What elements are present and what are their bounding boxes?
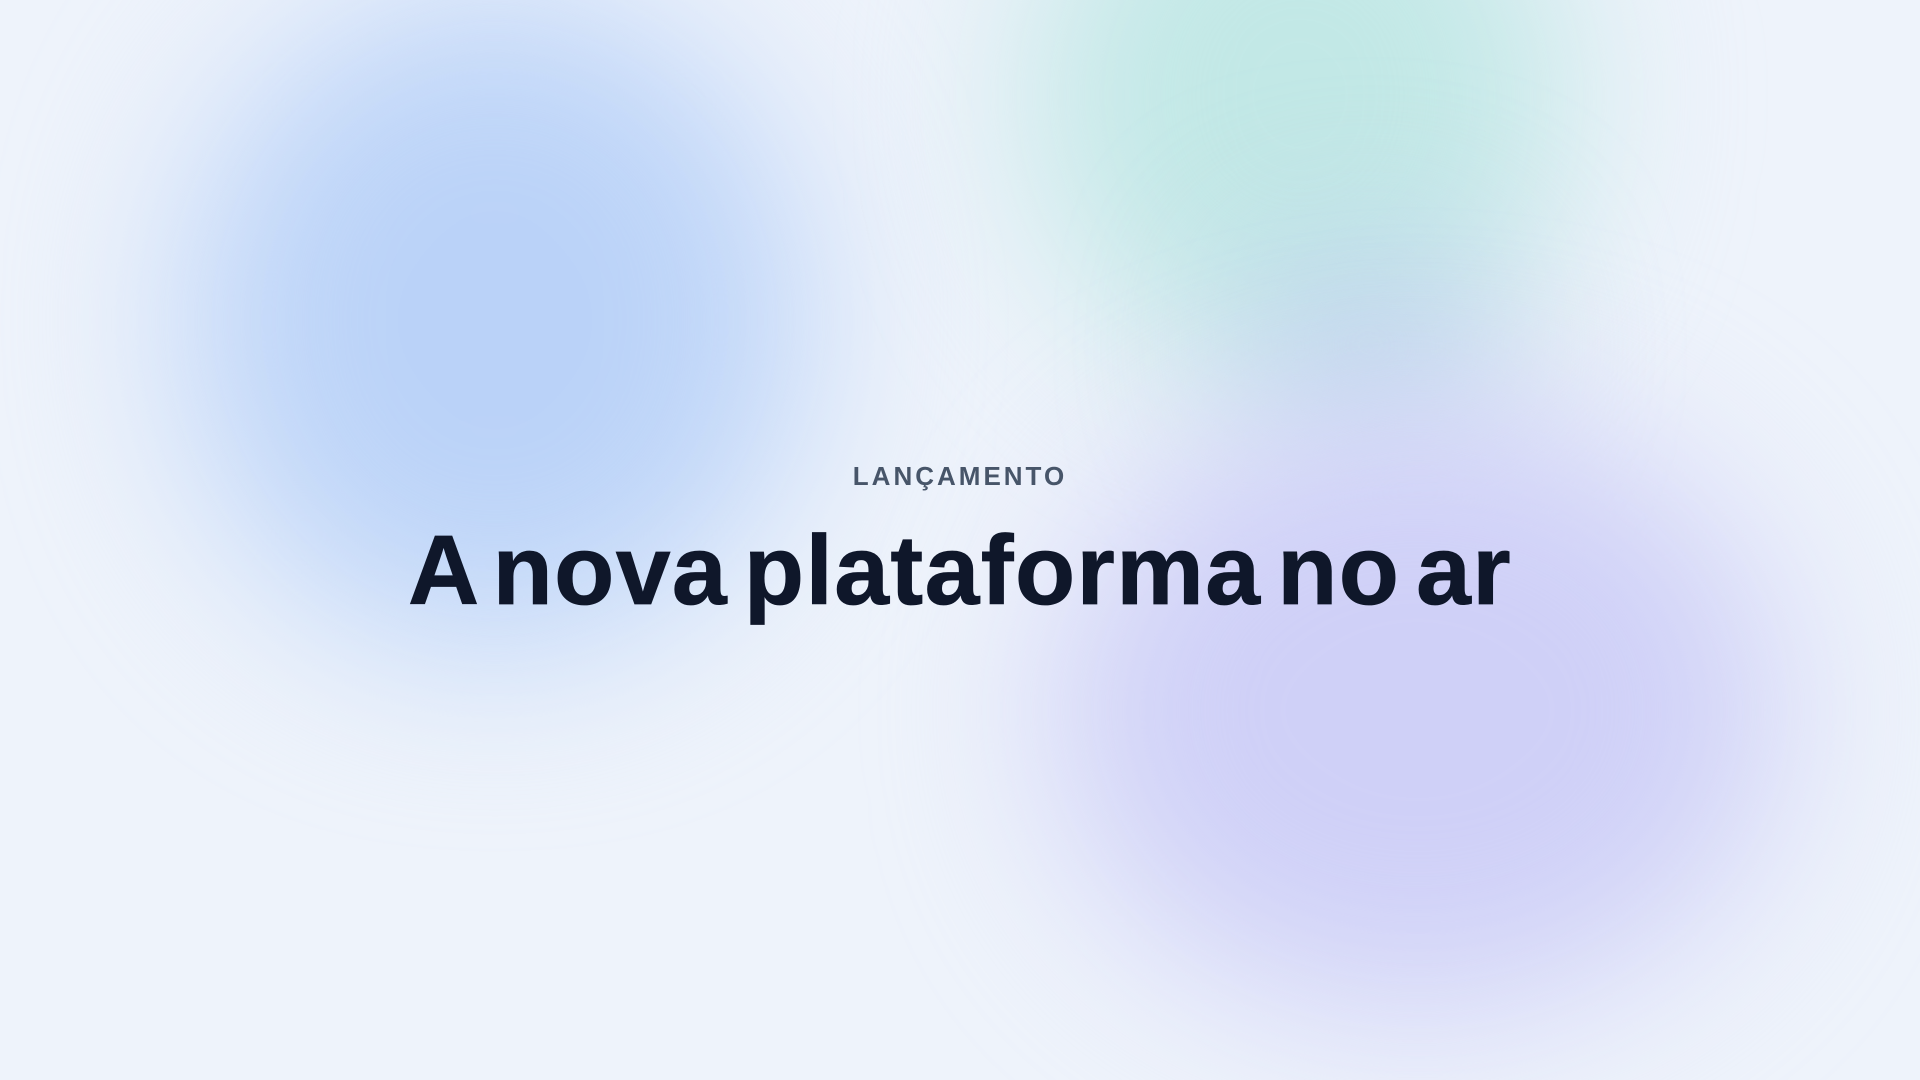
background blob: blue-grey overlap (1240, 250, 1500, 440)
eyebrow label: LANÇAMENTO (853, 461, 1067, 491)
background blob: blue (180, 0, 810, 655)
background blob: purple (1055, 405, 1780, 1015)
background blob: teal (1030, 0, 1570, 380)
title: A nova plataforma no ar (408, 515, 1512, 625)
